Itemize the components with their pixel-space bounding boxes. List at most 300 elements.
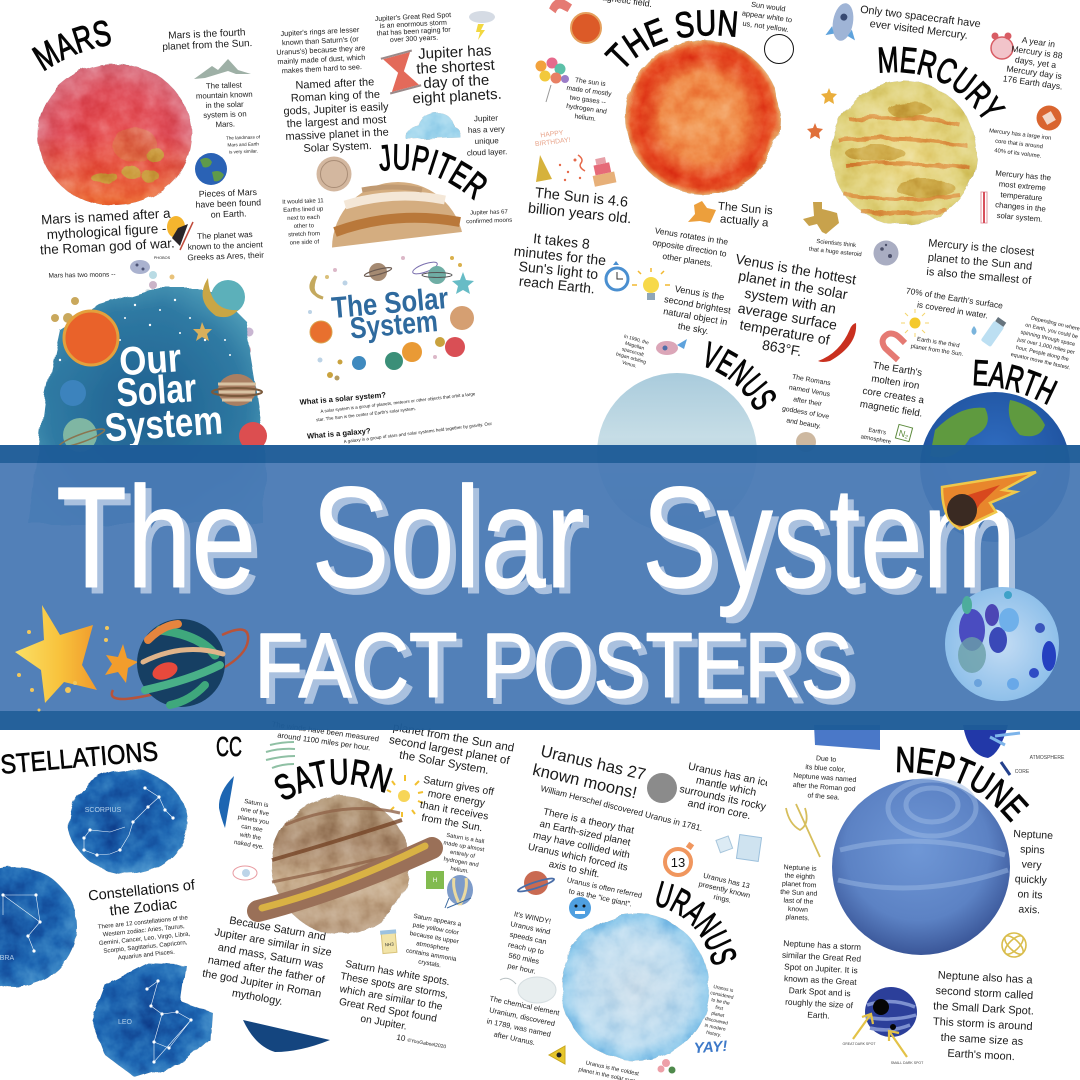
text: theory: Uranus which forced its: [527, 842, 629, 874]
text: spins quickly: quickly: [1014, 873, 1048, 887]
text: naked eye: can see: [241, 823, 264, 834]
text: galaxy definition: A galaxy is a group of stars and solar systems held together by gravity. Our: [343, 421, 493, 444]
icon: light bulb: [632, 268, 670, 300]
text: eighth planet: Neptune is: [783, 864, 817, 873]
text: extreme temperature: solar system.: [996, 211, 1043, 224]
text: red spot: over 300 years.: [390, 35, 438, 44]
text: spinning through space: spinning through space: [1020, 330, 1076, 348]
text: year in Mercury: Mercury day is: [1006, 63, 1063, 81]
icon: orange star: [688, 201, 716, 223]
heading: JUPITER: JUPITER: [379, 144, 487, 201]
poster: Earth: [859, 285, 1080, 542]
text: white spots: These spots are storms,: [339, 971, 449, 1001]
text: pieces of Mars: Pieces of Mars: [199, 187, 258, 199]
icon: teal ringed planet: [58, 418, 106, 452]
text: gives off energy: from the Sun.: [421, 813, 483, 834]
text: eighth planet: planet from: [782, 881, 817, 889]
text: 11 Earths: stretch from: [288, 231, 320, 238]
icon: cake: [589, 156, 616, 187]
text: two spacecraft: Only two spacecraft have: [859, 4, 981, 30]
text: hottest planet: Venus is the hottest: [734, 251, 858, 288]
text: windy: 560 miles: [508, 951, 540, 966]
text: happy birthday: BIRTHDAY!: [535, 137, 571, 148]
text: theory: axis to shift.: [548, 859, 601, 880]
text: small dark spot: Earth's moon.: [947, 1048, 1015, 1063]
text: Romans named Venus: The Romans: [791, 374, 832, 387]
icon: storm cloud: [469, 11, 495, 40]
icon: storm planet with arrows: [853, 987, 917, 1057]
icon: mountain: [194, 59, 251, 79]
icon: comet: [942, 472, 1036, 529]
title: The Solar System: Solar: [312, 457, 584, 618]
icon: Mars god figure: [167, 216, 193, 250]
text: hydrogen ball: hydrogen and: [443, 857, 479, 869]
text: named after father: Because Saturn and: [228, 915, 327, 943]
text: cloud layer: unique: [475, 136, 499, 146]
icon: 13 ring: [665, 842, 694, 875]
text: first discovered: considered: [710, 990, 734, 1001]
text: named after father: Jupiter are similar in size: [214, 926, 333, 959]
text: year in Mercury: Mercury is 88: [1011, 44, 1063, 61]
text: iron core: core that is around: [995, 139, 1043, 150]
text: naked eye: with the: [238, 831, 262, 842]
poster: Mercury: [803, 3, 1063, 287]
label: core: CORE: [1015, 769, 1030, 775]
text: 12 constellations: Scorpio, Sagittarius, Capricorn,: [103, 939, 188, 955]
icon: blue face: [569, 897, 591, 919]
text: named after father: named after the father of: [207, 954, 326, 987]
icon: cloud: [500, 977, 556, 1003]
poster: Saturn: [201, 720, 515, 1050]
icon: coin: [796, 432, 816, 452]
text: rings: makes them hard to see.: [281, 62, 362, 75]
text: second brightest: second brightest: [663, 294, 732, 316]
text: 11 Earths: It would take 11: [282, 198, 325, 206]
text: iron core: Mercury has a large iron: [989, 128, 1052, 142]
text: great dark spot: Earth.: [807, 1010, 830, 1021]
illustration: moon and planets: [310, 260, 474, 370]
text: extreme temperature: temperature: [1000, 190, 1043, 203]
text: named after father: the god Jupiter in Roman: [201, 968, 322, 1000]
text: tallest mountain: The tallest: [206, 80, 243, 91]
text: Roman god of war: the Roman god of war.: [40, 235, 175, 257]
text: named after father: mythology.: [231, 987, 284, 1008]
text: rotates opposite: opposite direction to: [652, 237, 728, 259]
text: winds fragment: around 1100 miles per hour.: [277, 730, 371, 752]
text: white spots: Great Red Spot found: [338, 997, 438, 1025]
text: windy: speeds can: [509, 930, 547, 946]
icon: iron badge: [1036, 106, 1062, 130]
icon: big star: [15, 605, 97, 703]
banner: blue title band: [0, 445, 1080, 730]
text: pale yellow: Saturn appears a: [413, 913, 462, 928]
heading: The Solar System: The Solar: [330, 282, 450, 325]
text: tallest mountain: system is on: [203, 109, 247, 120]
text: naked eye: planets you: [237, 814, 270, 826]
heading fragment: CC: [216, 731, 242, 762]
text: 67 moons: confirmed moons: [466, 218, 512, 225]
text: third planet: Earth is the third: [916, 337, 960, 349]
text: the Sun is a star: actually a: [719, 213, 769, 230]
text: first discovered: first: [715, 1005, 724, 1012]
text: closest planet: planet to the Sun and: [927, 252, 1033, 273]
icon: eye: [233, 866, 257, 880]
text: spinning through space: Depending on where: [1030, 316, 1080, 333]
text: ice mantle: and iron core.: [687, 797, 752, 822]
text: shortest day: eight planets.: [412, 86, 502, 107]
text: spins quickly: Neptune: [1013, 828, 1053, 842]
poster: The Sun: [513, 0, 794, 297]
text: great dark spot: Spot on Jupiter. It is: [784, 961, 858, 975]
text: blue color: after the Roman god: [793, 782, 856, 793]
text: theory: an Earth-sized planet: [539, 819, 632, 849]
text: first discovered: to be the: [711, 997, 731, 1007]
icon: balloons: [536, 58, 569, 102]
heading: SATURN: SATURN: [274, 758, 393, 800]
heading: URANUS: URANUS: [656, 880, 736, 965]
icon: blue block: [814, 725, 880, 750]
icon: coin: [316, 156, 352, 192]
text: gives off energy: more energy: [427, 788, 487, 809]
text: small dark spot: This storm is around: [933, 1016, 1033, 1033]
text: asteroid: that a huge asteroid: [809, 247, 862, 258]
text: blue color: Neptune was named: [793, 773, 857, 784]
page number: 10 ©YouGabeel2020: [396, 1033, 447, 1050]
text: two spacecraft: ever visited Mercury.: [869, 18, 969, 42]
label: phobos: PHOBOS: [154, 256, 171, 260]
text: pale yellow: because its upper: [409, 930, 459, 946]
icon: Texas shape: [803, 202, 839, 234]
text: hydrogen ball: entirely of: [449, 850, 476, 860]
icon: grey asteroid: [874, 240, 898, 266]
icon: moon rock: [130, 260, 150, 274]
text: sixth planet: the Solar System.: [398, 749, 490, 777]
text: rings: mainly made of dust, which: [277, 53, 366, 66]
heading: Our Solar System: System: [103, 398, 224, 451]
icon: ringed planet: [517, 871, 555, 895]
text: sun gases: The sun is: [574, 77, 607, 88]
text: tallest mountain: in the solar: [205, 100, 244, 110]
subtitle: FACT POSTERS: [254, 615, 852, 717]
text: 12 constellations: Gemini, Cancer, Leo, Virgo, Libra,: [99, 931, 191, 947]
text: small dark spot: second storm called: [935, 985, 1034, 1002]
text: first discovered: discovered: [704, 1016, 729, 1027]
text: red spot: is an enormous storm: [380, 20, 447, 30]
poster: Venus: [598, 225, 858, 445]
poster: Jupiter: [276, 11, 512, 248]
text: sixth planet: planet from the Sun and: [392, 721, 515, 755]
text: closest planet: Mercury is the closest: [928, 237, 1035, 259]
text: first discovered: planet: [711, 1011, 725, 1019]
panel: Leo: LEO: [118, 1019, 133, 1026]
text: hottest planet: average surface: [737, 300, 839, 333]
text: great dark spot: Neptune has a storm: [783, 938, 861, 952]
text: Herschel: William Herschel discovered Uranus in 1781.: [540, 783, 704, 833]
text: 11 Earths: other to: [294, 223, 315, 230]
text: small dark spot: the Small Dark Spot.: [933, 1000, 1034, 1018]
text: rotates opposite: other planets.: [662, 251, 714, 269]
text: spinning through space: on Earth, you could be: [1025, 322, 1078, 340]
text: extreme temperature: Mercury has the: [995, 169, 1051, 182]
text: 11 Earths: one side of: [290, 239, 320, 246]
panel: Leo: [92, 963, 212, 1078]
icon: striped ringed planet: [112, 619, 248, 707]
text: theory: may have collided with: [532, 830, 631, 861]
text: named after: gods, Jupiter is easily: [283, 101, 389, 118]
text: Magellan: In 1990, the: [623, 334, 650, 347]
text: fourth planet: Mars is the fourth: [168, 27, 246, 42]
heading: EARTH: EARTH: [974, 360, 1058, 405]
title: The Solar System: The: [56, 457, 256, 618]
icon: sun: [64, 311, 118, 365]
icon: white circle: [764, 34, 794, 64]
text: white spots: on Jupiter.: [360, 1014, 408, 1033]
text: spins quickly: very: [1021, 858, 1043, 872]
text: tallest mountain: mountain known: [196, 90, 253, 101]
text: shortest day: the shortest: [416, 57, 496, 78]
text: 27 moons: known moons!: [531, 761, 639, 802]
planet: Earth: [920, 392, 1070, 542]
text: naked eye: Saturn is: [244, 798, 269, 809]
text: blue color: of the sea.: [807, 792, 840, 802]
icon: 13 ring: 13: [671, 855, 685, 870]
text: 70 percent water: 70% of the Earth's surface: [905, 285, 1004, 311]
subtitle: FACT POSTERS: POSTERS: [482, 615, 852, 717]
text: named after: massive planet in the: [285, 127, 389, 143]
text: atmosphere: atmosphere: [860, 434, 891, 446]
planet: The Sun: [626, 40, 780, 194]
text: gives off energy: Saturn gives off: [422, 775, 495, 798]
text: uranium: in 1789, was named: [486, 1016, 552, 1039]
planet: Mars: [38, 64, 192, 206]
text: happy birthday: HAPPY: [540, 130, 564, 139]
text: eighth planet: the eighth: [784, 873, 815, 881]
text: coldest: Uranus is the coldest: [585, 1060, 640, 1078]
icon: small star: [105, 644, 138, 683]
text: Romans named Venus: named Venus: [788, 384, 831, 399]
text: 4.6 billion years: billion years old.: [527, 201, 632, 227]
icon: radiation sign: [549, 1046, 565, 1064]
text: shortest day: day of the: [423, 72, 490, 92]
text: 4.6 billion years: The Sun is 4.6: [534, 185, 629, 211]
poster: Uranus: [486, 742, 772, 1080]
icon: earth: [60, 380, 86, 406]
text: Magellan: Magellan: [624, 341, 645, 352]
icon: magnet: [883, 334, 905, 360]
text: solar system definition: star. The Sun is the center of Earth's solar system.: [316, 406, 416, 422]
text: hottest planet: system with an: [743, 285, 837, 317]
text: fourth planet: planet from the Sun.: [162, 38, 253, 53]
text: year in Mercury: days, yet a: [1014, 54, 1057, 70]
text: spinning through space: equator move the fastest.: [1010, 352, 1071, 371]
text: naked eye: one of five: [240, 806, 270, 818]
text: tallest mountain: Mars.: [215, 119, 235, 129]
text: third planet: planet from the Sun.: [910, 344, 964, 358]
heading: Our Solar System: Our: [118, 336, 183, 384]
text: blue color: its blue color,: [805, 764, 846, 774]
text: eighth planet: the Sun and: [780, 889, 818, 898]
text: winds fragment: The winds have been measured: [271, 720, 379, 744]
text: sun gases: helium.: [574, 113, 596, 123]
icon: ammonia jar: NH3: [385, 942, 394, 947]
text: red spot: Jupiter's Great Red Spot: [375, 12, 451, 23]
text: hydrogen ball: made up almost: [443, 840, 485, 853]
planet: Saturn: [258, 796, 432, 934]
text: white sun: appear white to: [741, 8, 793, 24]
icon: gold star: [193, 322, 212, 341]
icon: magnet: [551, 0, 570, 11]
text: zodiac heading: the Zodiac: [109, 896, 178, 919]
text: Ares: The planet was: [197, 230, 253, 241]
icon: small sun: [571, 13, 601, 43]
text: 27 moons: Uranus has 27: [539, 742, 647, 784]
dark sliver: [243, 1020, 330, 1052]
text: molten iron core: core creates a: [862, 386, 925, 406]
text: YAY: YAY!: [693, 1038, 728, 1057]
text: windy: It's WINDY!: [513, 909, 552, 926]
text: spinning through space: hour. People along the: [1015, 345, 1069, 363]
text: naked eye: naked eye.: [233, 839, 265, 851]
icon: hot air balloon: [445, 875, 473, 908]
text: ice mantle: Uranus has an ice: [687, 760, 772, 790]
label: great dark spot: GREAT DARK SPOT: [843, 1042, 876, 1046]
text: eighth planet: known: [788, 906, 808, 914]
icon: earth: [195, 153, 227, 185]
text: first discovered: in modern: [704, 1023, 726, 1033]
heading: THE SUN: THE SUN: [604, 10, 738, 67]
text: 70 percent water: is covered in water.: [916, 299, 989, 320]
text: 11 Earths: Earths lined up: [283, 206, 324, 214]
text: white spots: Saturn has white spots.: [344, 959, 451, 988]
text: rings: Uranus's) because they are: [276, 43, 366, 57]
text: white sun: us, not yellow.: [742, 19, 789, 34]
text: pieces of Mars: have been found: [195, 197, 261, 210]
text: pale yellow: atmosphere: [416, 940, 450, 953]
text: named after: Solar System.: [303, 140, 372, 155]
heading: Our Solar System: Solar: [115, 366, 198, 416]
text: red spot: that has been raging for: [377, 27, 451, 38]
icon: flower: [658, 1059, 676, 1074]
text: blue color: Due to: [816, 755, 837, 764]
planet: Venus: [597, 373, 757, 533]
heading: MARS: MARS: [32, 20, 111, 72]
text: Romans named Venus: goddess of love: [781, 405, 830, 421]
icon: rocket: [825, 1, 861, 43]
text: sixth planet: second largest planet of: [388, 734, 511, 767]
confetti dots: [308, 256, 462, 380]
text: first discovered: history.: [706, 1030, 722, 1039]
text: landmass: is very similar.: [229, 148, 258, 154]
icon: gold star: [821, 88, 837, 104]
icon: confetti: [559, 155, 585, 181]
text: sun gases: two gases --: [569, 94, 606, 106]
text: uranium: Uranium, discovered: [488, 1005, 556, 1028]
label: small dark spot: SMALL DARK SPOT: [891, 1061, 924, 1065]
text: named after: the largest and most: [286, 114, 387, 130]
text: atmosphere: Earth's: [868, 428, 887, 437]
text: rings: Jupiter's rings are lesser: [280, 25, 360, 38]
text: ice mantle: surrounds its rocky: [678, 783, 768, 813]
icon: green striped planet: [266, 742, 295, 768]
text: what is a galaxy: What is a galaxy?: [307, 426, 371, 441]
text: 13 rings: Uranus has 13: [702, 871, 751, 890]
text: extreme temperature: most extreme: [998, 179, 1046, 193]
icon: sun: [387, 775, 423, 817]
text: ice mantle: [678, 760, 772, 822]
text: 12 constellations: There are 12 constellations of the: [97, 914, 189, 931]
text: molten iron core: molten iron: [870, 374, 920, 392]
text: eighth planet: planets.: [785, 914, 810, 922]
watercolor background: [30, 290, 265, 525]
text: 12 constellations: Aquarius and Pisces.: [117, 949, 175, 962]
icon: N2 square: N₂: [898, 428, 910, 440]
icon: chili pepper: [818, 323, 856, 362]
text: landmass: The landmass of: [226, 134, 261, 141]
text: spinning through space: just over 1,000 miles per: [1016, 337, 1075, 356]
text: pale yellow: contains ammonia: [405, 947, 457, 963]
text: 67 moons: Jupiter has 67: [470, 209, 509, 217]
text: Roman god of war: Mars is named after a: [41, 206, 171, 227]
text: 12 constellations: Western zodiac: Aries, Taurus,: [103, 923, 185, 938]
text: 11 Earths: next to each: [287, 215, 320, 222]
icon: alarm clock: [606, 261, 628, 290]
text: Magellan: spacecraft: [621, 346, 645, 359]
text: ice mantle: mantle which: [695, 774, 758, 799]
decorative dots: [51, 271, 254, 355]
text: gives off energy: than it receives: [419, 800, 489, 823]
text: hydrogen ball: helium.: [450, 866, 470, 875]
icon: striped planet: [212, 374, 262, 406]
icon: grey moon: [647, 773, 677, 803]
icon: hydrogen square: [426, 871, 444, 889]
icon: teal blob and crescent moon: [203, 278, 245, 317]
text: extreme temperature: changes in the: [995, 200, 1046, 214]
text: Romans named Venus: after their: [793, 396, 823, 408]
text: 13 rings: rings.: [713, 892, 732, 905]
text: windy: per hour.: [507, 961, 537, 976]
heading: constellations: STELLATIONS: [0, 736, 159, 780]
icon: trident: [786, 804, 820, 857]
text: eighth planet: last of the: [783, 897, 814, 906]
icon: hydrogen square: H: [433, 878, 437, 884]
text: first discovered: Uranus is: [713, 984, 734, 994]
text: Roman god of war: mythological figure -: [46, 221, 167, 242]
poster: Constellations: [0, 731, 330, 1078]
planet: Jupiter: [332, 182, 462, 248]
blue sliver: [219, 776, 234, 828]
text: ice giant: to as the "ice giant".: [568, 886, 633, 909]
text: pale yellow: crystals.: [418, 958, 442, 969]
poster: Neptune: [780, 730, 1065, 1065]
text: molten iron core: magnetic field.: [859, 399, 923, 420]
icon: pink alarm clock: [991, 32, 1013, 59]
heading: NEPTUNE: NEPTUNE: [897, 746, 1030, 823]
text: Romans named Venus: and beauty.: [786, 417, 822, 430]
icon: blue cloud: [407, 113, 461, 140]
planet: Uranus: [561, 913, 709, 1061]
text: 8 minutes: minutes for the: [513, 243, 607, 268]
text: pale yellow: pale yellow color: [412, 922, 459, 937]
text: white sun: Sun would: [751, 0, 786, 13]
text: hottest planet: planet in the solar: [737, 267, 849, 302]
text: spins quickly: on its: [1017, 888, 1043, 902]
text: spins quickly: spins: [1020, 843, 1045, 857]
heading: The Solar System: [330, 282, 452, 347]
text: the Sun is a star: The Sun is: [717, 201, 773, 217]
text: 8 minutes: It takes 8: [532, 230, 591, 252]
text: 13 rings: presently known: [698, 879, 751, 900]
text: zodiac heading: Constellations of: [87, 877, 197, 905]
